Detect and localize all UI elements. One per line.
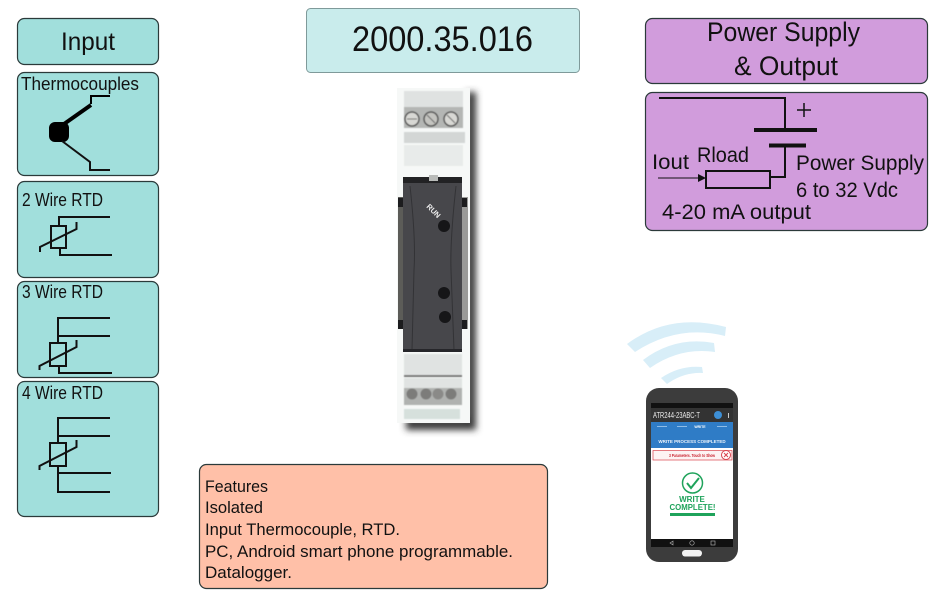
app title bar <box>651 408 733 422</box>
circuit diagram <box>658 98 817 188</box>
success check <box>682 473 702 493</box>
panel: power supply and output heading: Power Supply <box>707 17 860 47</box>
panel: features: Features <box>205 477 268 496</box>
panel: features: PC, Android smart phone programmable. <box>205 542 513 561</box>
label: 2 wire RTD: 2 Wire RTD <box>22 190 103 210</box>
title: model number <box>306 8 580 72</box>
label: 4 wire RTD: 4 Wire RTD <box>22 383 103 403</box>
panel: features: Isolated <box>205 498 263 517</box>
home button <box>682 550 702 556</box>
panel: power supply and output heading: & Output <box>734 51 838 81</box>
status and port holes <box>438 220 451 323</box>
icon: thermocouple junction <box>49 96 110 170</box>
panel: features: Datalogger. <box>205 563 292 582</box>
panel: 2 wire RTD <box>18 182 158 278</box>
icon: wireless signal <box>627 322 726 384</box>
circuit labels: Rload <box>697 144 749 167</box>
circuit labels <box>652 144 924 224</box>
panel: thermocouples <box>18 72 158 176</box>
panel: 4 wire RTD <box>18 382 158 516</box>
phone: app screenshot <box>646 388 738 562</box>
device housing <box>397 88 470 423</box>
blue header: WRITE <box>694 425 706 429</box>
icon: 4 wire RTD symbol <box>40 418 111 492</box>
circuit labels: Power Supply <box>796 152 924 175</box>
circuit labels: 6 to 32 Vdc <box>796 179 898 202</box>
lower terminal block <box>404 354 462 419</box>
success message: WRITE <box>679 495 706 504</box>
android navigation bar <box>651 539 733 547</box>
panel: features <box>200 464 548 588</box>
warning strip: 3 Parameters. Touch to Show <box>669 453 715 458</box>
success message: COMPLETE! <box>670 503 716 512</box>
icon: 2 wire RTD symbol <box>40 217 112 255</box>
panel: 3 wire RTD <box>18 282 158 378</box>
icon: 3 wire RTD symbol <box>40 318 112 373</box>
circuit labels: 4-20 mA output <box>662 201 811 224</box>
dark front cover <box>398 175 468 352</box>
panel: input heading <box>18 18 158 64</box>
success message <box>670 495 716 516</box>
warning strip <box>653 450 732 460</box>
panel: power supply and output heading <box>646 17 928 84</box>
blue header <box>651 422 733 448</box>
device shadow <box>406 92 476 430</box>
panel: input heading: Input <box>61 28 115 56</box>
circuit labels: Iout <box>652 151 689 174</box>
panel: features: Input Thermocouple, RTD. <box>205 520 400 539</box>
phone body <box>646 388 738 562</box>
app title bar: ATR244-23ABC-T <box>653 410 700 420</box>
white content area <box>651 448 733 539</box>
label: thermocouples: Thermocouples <box>21 74 139 94</box>
device: DIN rail transmitter <box>397 88 476 430</box>
blue header: WRITE PROCESS COMPLETED <box>658 439 726 444</box>
label: RUN: RUN <box>425 202 442 220</box>
status bar <box>651 403 733 408</box>
label: 3 wire RTD: 3 Wire RTD <box>22 282 103 302</box>
upper terminal block <box>404 91 465 166</box>
title: model number: 2000.35.016 <box>352 20 533 59</box>
panel: output circuit <box>646 92 928 230</box>
